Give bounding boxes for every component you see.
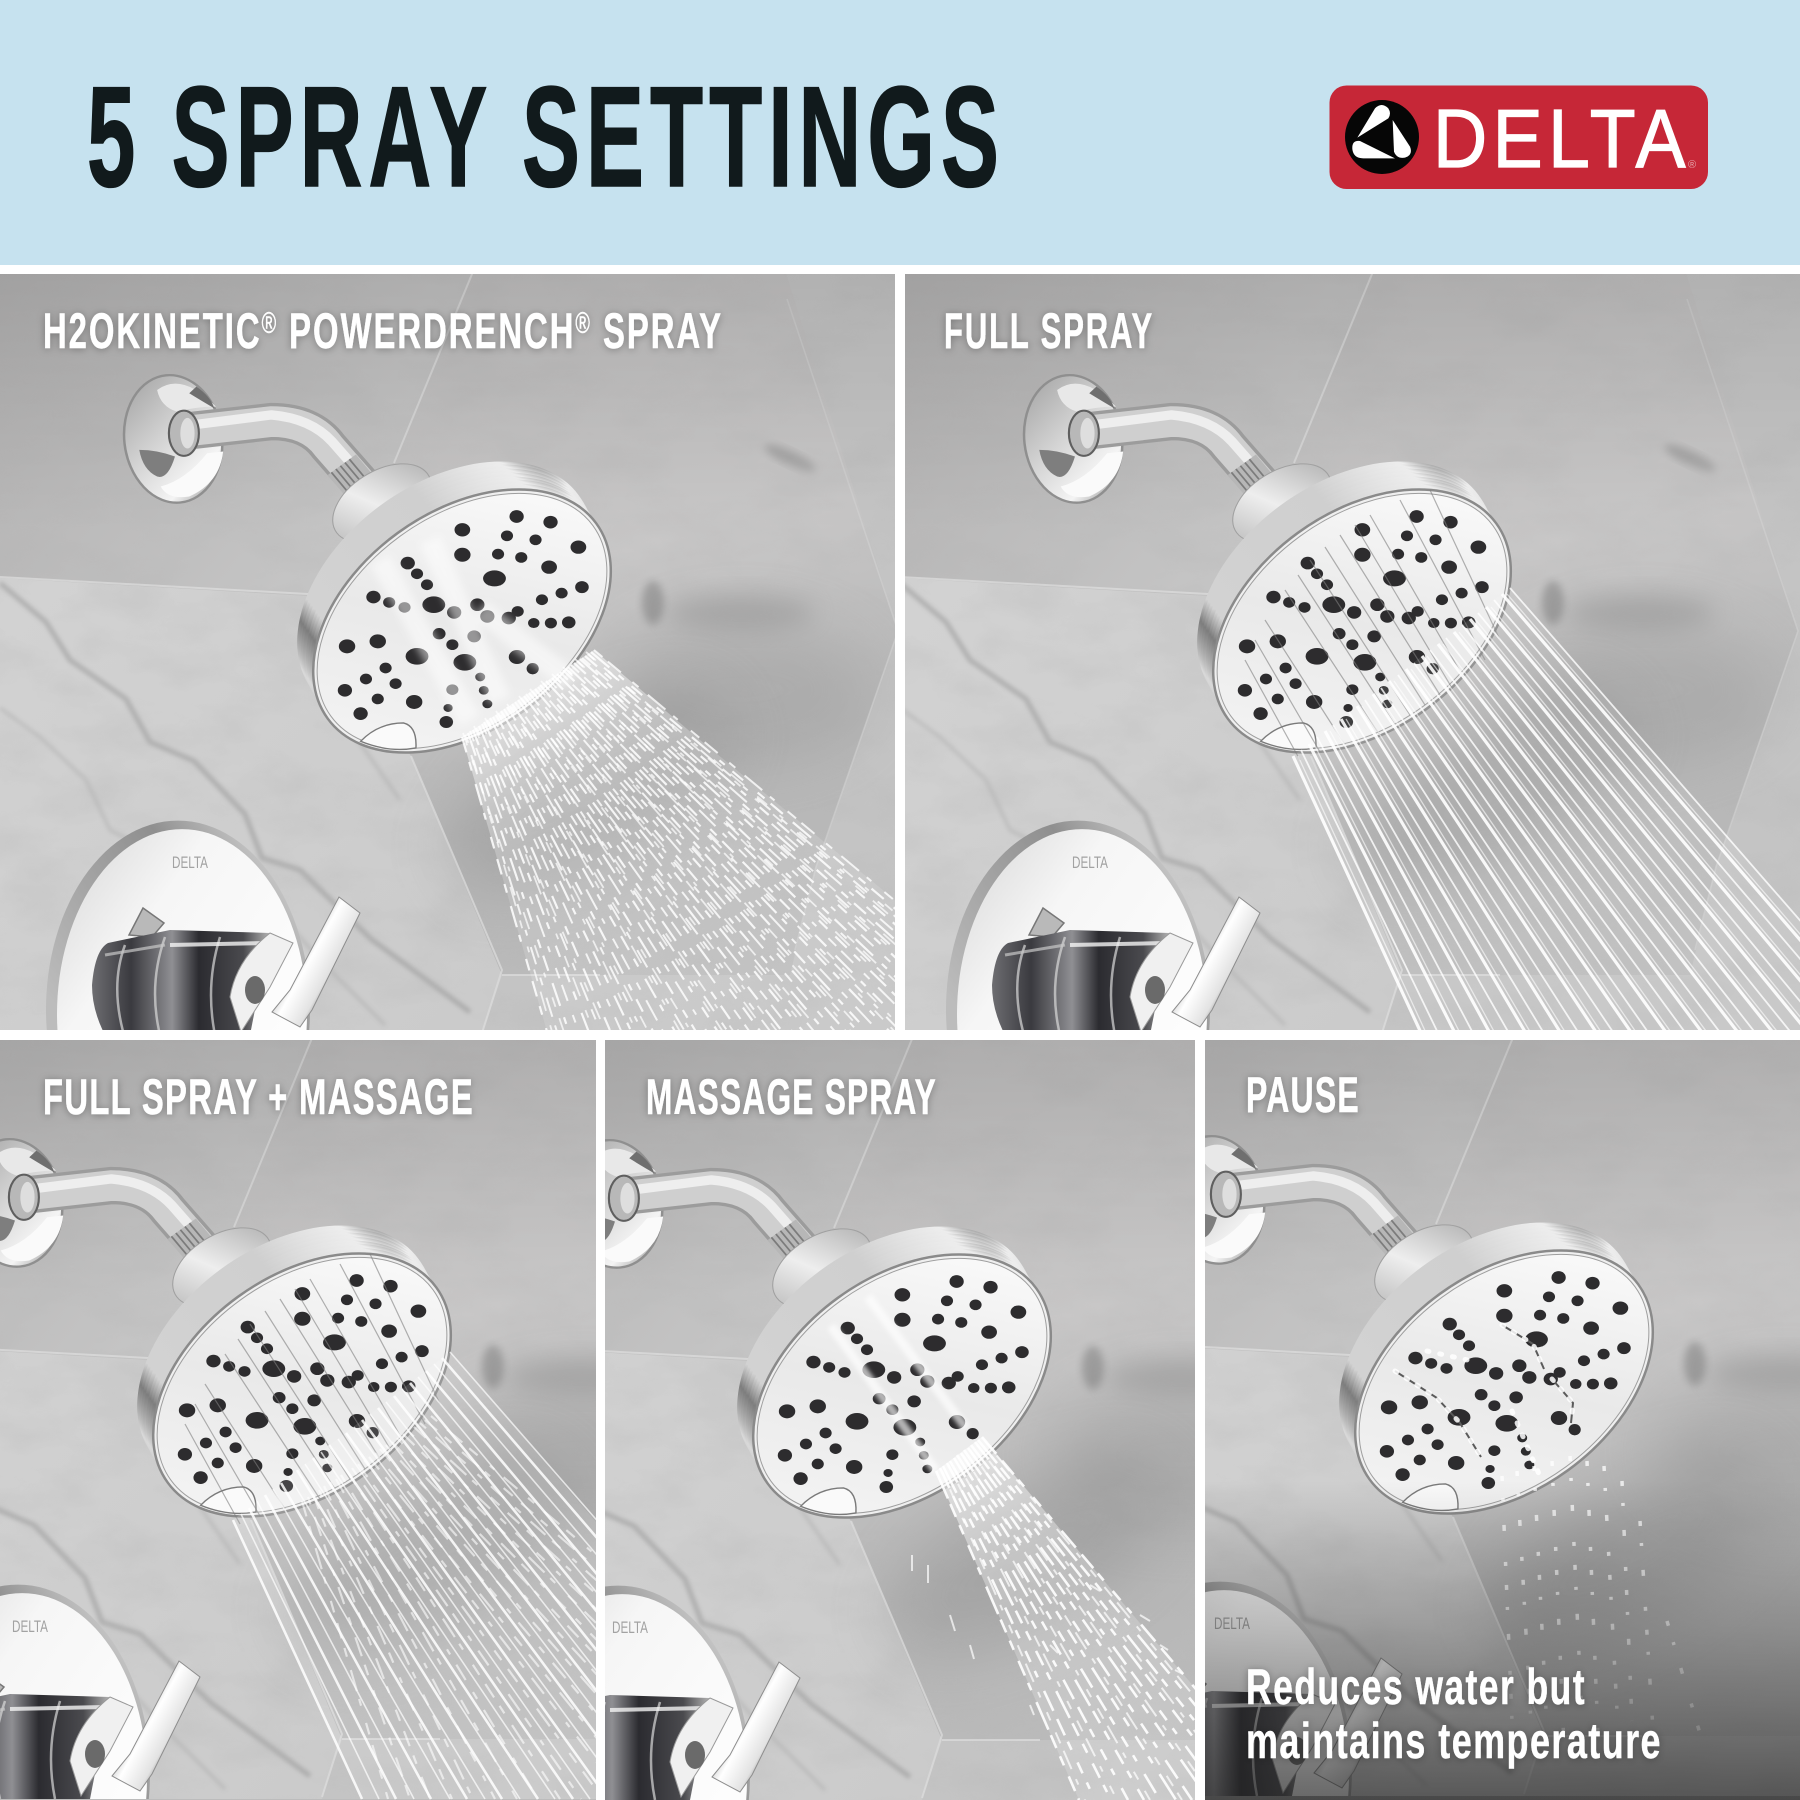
dark gradient behind caption (1205, 1481, 1800, 1800)
panel: massage spray (440, 1025, 1340, 1800)
shower valve (46, 821, 360, 1035)
panel label: H2OKINETIC (43, 303, 376, 359)
brand logo: ® (1688, 159, 1696, 171)
panel label: ® (575, 307, 592, 340)
title: 5 SPRAY SETTINGS (87, 58, 1005, 217)
panel: pause (1042, 1021, 1800, 1800)
panel: full spray (900, 260, 1800, 1035)
drenching water spray (380, 540, 1056, 1035)
full water spray (1293, 588, 1800, 1035)
marble wall (1042, 1021, 1800, 1796)
shower valve (946, 821, 1260, 1035)
marble wall (0, 260, 900, 1035)
panel: full spray plus massage (0, 1024, 885, 1800)
panel label: POWERDRENCH (278, 303, 575, 359)
panel label: FULL SPRAY (944, 303, 1154, 359)
panel label: SPRAY (592, 303, 723, 359)
marble wall (440, 1025, 1340, 1800)
panel: H2Okinetic PowerDrench spray (0, 260, 1056, 1035)
panel label: PAUSE (1246, 1067, 1360, 1123)
marble wall (900, 260, 1800, 1035)
shower valve (0, 1585, 200, 1799)
combined full and massage spray (233, 1352, 885, 1799)
shower head (1017, 371, 1560, 807)
shower head (557, 1136, 1100, 1572)
caption: Reduces water but (1246, 1659, 1586, 1715)
panel label: MASSAGE SPRAY (646, 1069, 937, 1125)
shower head (0, 1135, 500, 1571)
brand logo (1330, 86, 1708, 189)
streaks on shower face (1245, 490, 1500, 760)
shower valve (1088, 1582, 1402, 1796)
marble wall (0, 1024, 740, 1799)
trickling droplets (1395, 1325, 1701, 1746)
caption (1246, 1659, 1662, 1769)
header banner (0, 0, 1800, 265)
shower head (1159, 1132, 1702, 1568)
streaks on shower face (185, 1254, 440, 1524)
brand logo: DELTA (1433, 92, 1691, 185)
massage water jet (831, 1297, 1290, 1800)
panel label: FULL SPRAY + MASSAGE (43, 1069, 474, 1125)
panel label: ® (262, 307, 278, 340)
shower valve (486, 1586, 800, 1800)
shower head (117, 371, 660, 807)
